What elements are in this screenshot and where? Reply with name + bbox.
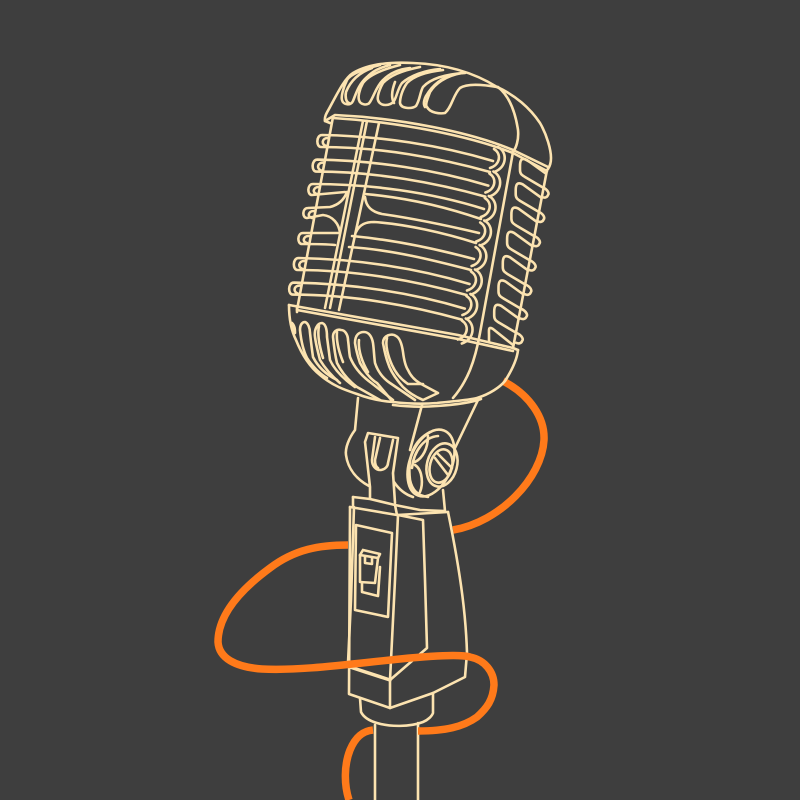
yoke arm [365, 433, 398, 503]
handle collar [360, 693, 433, 726]
grille frame [297, 117, 333, 310]
grille right scallops [458, 147, 505, 344]
neck front lines [410, 400, 478, 450]
side edge [513, 170, 547, 348]
cable: upper loop behind the head [453, 381, 544, 530]
lower band [289, 305, 518, 351]
upper band [325, 115, 548, 167]
switch [360, 550, 380, 596]
lower bowl fins [292, 322, 438, 402]
side slots [489, 159, 548, 345]
lower bowl [289, 305, 518, 404]
vertical strip [325, 121, 379, 310]
neck and yoke [346, 398, 478, 503]
center edge [390, 515, 398, 708]
neck left side [346, 398, 369, 486]
pole [375, 723, 418, 800]
knob face [422, 440, 462, 490]
body outline [349, 507, 467, 708]
handle body [348, 490, 467, 800]
dome top fins [342, 65, 497, 113]
yoke slot [372, 437, 393, 470]
right panel [390, 515, 427, 680]
bevel [350, 667, 390, 680]
side divider [453, 87, 518, 398]
grille bars [289, 135, 493, 320]
knob [398, 423, 464, 503]
cable: lower loop in front of body [218, 545, 494, 731]
switch plate [355, 525, 392, 617]
cable: tail behind pole [345, 730, 373, 800]
collar top [353, 490, 445, 511]
dome outline [325, 63, 551, 169]
microphone head [289, 63, 551, 407]
